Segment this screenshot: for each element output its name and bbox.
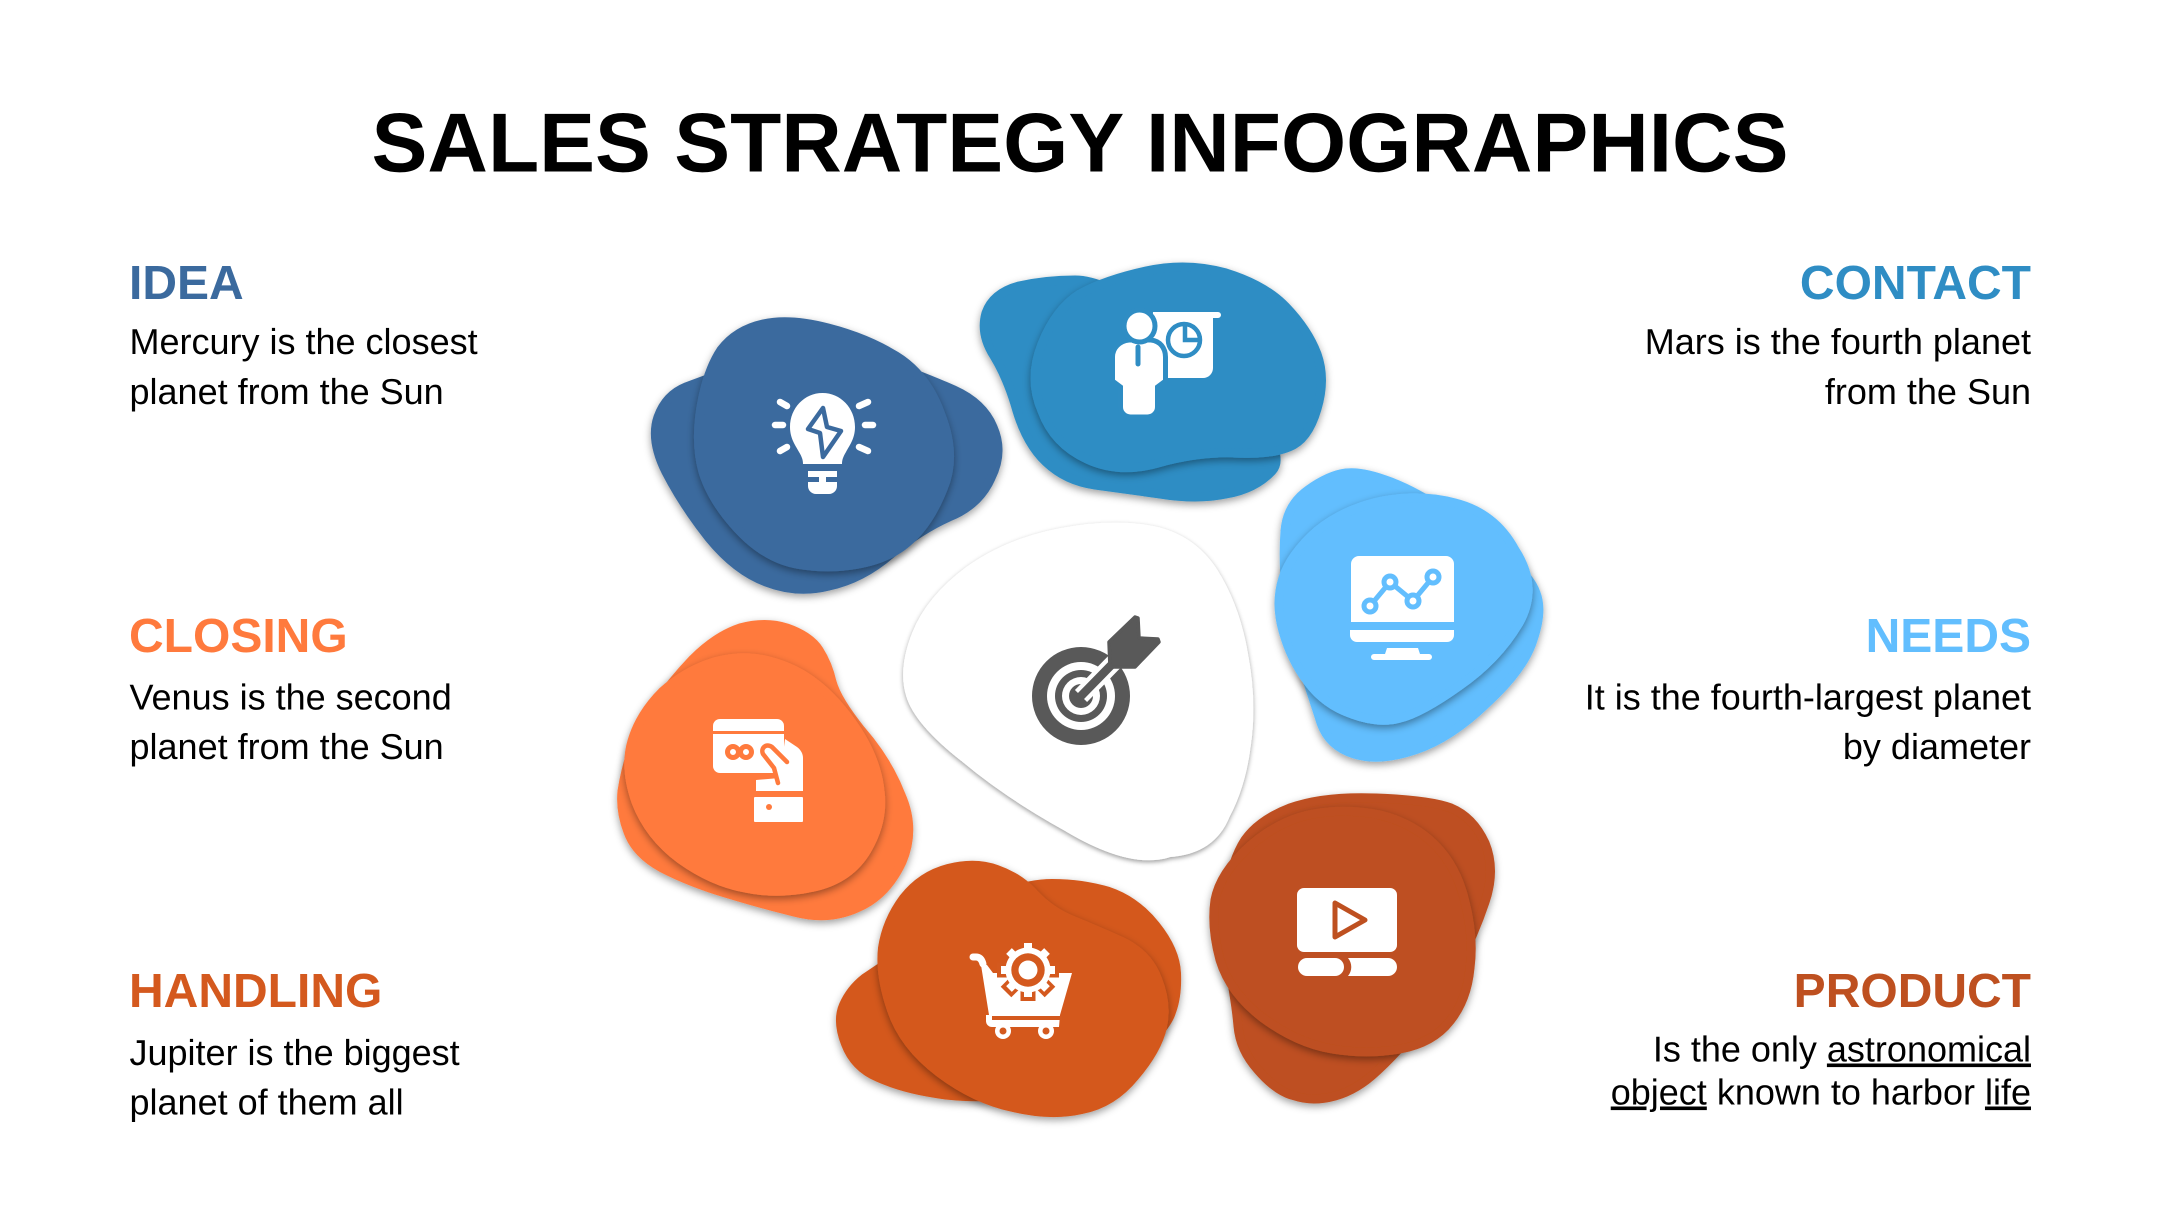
text block: product: object known to harbor life	[1611, 1072, 2031, 1112]
icon: video player	[1297, 888, 1397, 976]
text block: closing	[129, 610, 452, 767]
panel: needs blob	[1279, 473, 1539, 757]
text block: product: PRODUCT	[1794, 965, 2031, 1018]
icon: presenter with board	[1112, 310, 1221, 417]
text block: contact: CONTACT	[1800, 257, 2031, 310]
panel: center target blob	[907, 526, 1249, 856]
text block: product	[1611, 965, 2031, 1112]
text block: product: Is the only astronomical	[1653, 1028, 2031, 1070]
text block: idea: Mercury is the closest	[130, 321, 478, 362]
icon: monitor with line chart	[1350, 556, 1454, 660]
text block: handling	[129, 965, 460, 1122]
text block: contact	[1645, 257, 2031, 412]
text block: contact: Mars is the fourth planet	[1645, 321, 2031, 362]
text block: handling: HANDLING	[129, 965, 382, 1018]
text block: handling: planet of them all	[130, 1082, 404, 1122]
text block: needs: It is the fourth-largest planet	[1585, 676, 2031, 718]
title: SALES STRATEGY INFOGRAPHICS	[372, 96, 1788, 190]
text block: idea: IDEA	[129, 257, 244, 310]
text block: contact: from the Sun	[1825, 371, 2031, 412]
text block: handling: Jupiter is the biggest	[130, 1032, 460, 1073]
icon: target with arrow	[1032, 617, 1159, 745]
icon: light bulb	[775, 393, 873, 494]
panel: product blob	[1214, 798, 1490, 1099]
panel: contact blob	[984, 267, 1322, 497]
panel: idea blob	[655, 322, 998, 589]
text block: idea	[129, 257, 478, 412]
panel: handling blob	[840, 865, 1177, 1113]
text block: closing: Venus is the second	[130, 676, 452, 718]
text block: closing: planet from the Sun	[130, 726, 444, 767]
panel: closing blob	[622, 624, 909, 916]
text block: needs	[1585, 610, 2031, 767]
icon: hand with credit card	[713, 719, 803, 822]
text block: needs: NEEDS	[1866, 610, 2031, 663]
text block: needs: by diameter	[1843, 726, 2031, 767]
icon: shopping cart with gear	[973, 943, 1072, 1039]
text block: closing: CLOSING	[129, 610, 348, 663]
text block: idea: planet from the Sun	[130, 371, 444, 412]
